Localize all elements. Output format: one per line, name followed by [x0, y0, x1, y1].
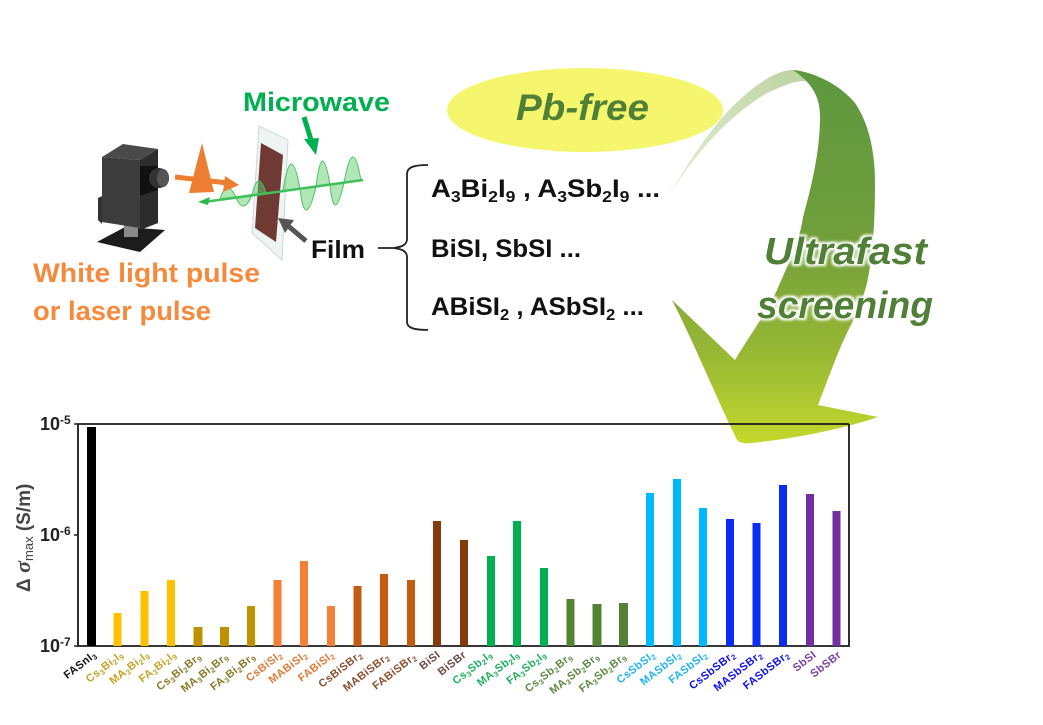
- y axis title: Δ σmax (S/m): [10, 484, 36, 592]
- x axis labels: MA3Bi2Br9: [179, 651, 231, 696]
- x axis labels: SbSI: [791, 649, 819, 674]
- y axis tick labels: 10-6: [40, 524, 71, 545]
- x axis labels: MA3Sb2I9: [475, 649, 522, 690]
- label: White light pulse or laser pulse: White light pulse: [33, 258, 260, 288]
- text: material families: [431, 175, 660, 324]
- x axis labels: MASbSI2: [638, 649, 684, 689]
- x axis labels: CsSbSI2: [615, 649, 658, 687]
- icon: curved screening arrow: [667, 70, 878, 443]
- text: material families: A3Bi2I9 , A3Sb2I9 ...: [431, 175, 660, 206]
- x axis labels: MABiSI2: [267, 649, 310, 687]
- x axis labels: Cs3Bi2I9: [84, 649, 126, 686]
- text: material families: ABiSI2 , ASbSI2 ...: [431, 293, 644, 324]
- x axis labels: CsBiSBr2: [316, 649, 365, 691]
- icon: orange light cone: [189, 143, 214, 193]
- bar chart: [10, 413, 849, 698]
- heading: Ultrafast screening: screening: [757, 285, 933, 327]
- heading: Ultrafast screening: Ultrafast: [764, 231, 928, 273]
- y axis tick labels: 10-7: [40, 635, 71, 656]
- x axis labels: MASbSBr2: [712, 649, 765, 695]
- label: White light pulse or laser pulse: [33, 258, 260, 326]
- heading: Pb-free: Pb-free: [516, 87, 649, 128]
- yellow ellipse: Pb-free: [447, 68, 723, 152]
- x axis labels: SbSBr: [808, 649, 844, 680]
- x axis labels: BiSI: [417, 649, 443, 673]
- x axis labels: CsBiSI2: [244, 649, 285, 685]
- x axis labels: FA3Bi2I9: [137, 649, 179, 686]
- arrow: film pointer: [278, 218, 306, 241]
- x axis labels: FASbSI2: [667, 649, 710, 687]
- label: Film: Film: [311, 236, 365, 264]
- x axis labels: Cs3Sb2Br9: [523, 651, 575, 696]
- y axis tick labels: [40, 413, 71, 656]
- x axis labels: Cs3Bi2Br9: [154, 651, 204, 694]
- x axis labels: Cs3Sb2I9: [450, 649, 495, 688]
- x axis labels: FASnI3: [62, 649, 99, 682]
- text: material families: BiSI, SbSI ...: [431, 235, 581, 263]
- x axis labels: FABiSBr2: [370, 651, 419, 693]
- icon: camera / light source: [97, 144, 169, 252]
- arrow: microwave pointer: [304, 117, 319, 155]
- label: White light pulse or laser pulse: or laser pulse: [33, 296, 211, 326]
- x axis labels: CsSbSBr2: [687, 649, 738, 693]
- y axis ticks: [74, 424, 78, 646]
- x axis labels: FA3Sb2I9: [504, 649, 549, 688]
- x axis labels: MABiSBr2: [341, 651, 392, 695]
- arrow: orange pulse: [175, 176, 239, 192]
- heading: Ultrafast screening: [757, 231, 933, 327]
- plot frame: [78, 424, 849, 646]
- y axis tick labels: 10-5: [40, 413, 71, 434]
- icon: microwave wave: [198, 157, 363, 210]
- label: Microwave: Microwave: [243, 87, 390, 117]
- x axis labels: MA3Sb2Br9: [548, 651, 602, 698]
- x axis labels: FASbSBr2: [741, 649, 792, 693]
- x axis labels: MA3Bi2I9: [107, 649, 152, 688]
- x axis labels: FABiSI2: [296, 649, 337, 685]
- x axis labels: [62, 649, 844, 698]
- x axis labels: FA3Sb2Br9: [577, 651, 629, 696]
- x axis labels: BiSBr: [436, 649, 469, 678]
- x axis labels: FA3Bi2Br9: [208, 651, 258, 694]
- bars: [87, 427, 840, 646]
- brace with connector: [378, 165, 428, 330]
- icon: film on glass slide: [252, 126, 288, 260]
